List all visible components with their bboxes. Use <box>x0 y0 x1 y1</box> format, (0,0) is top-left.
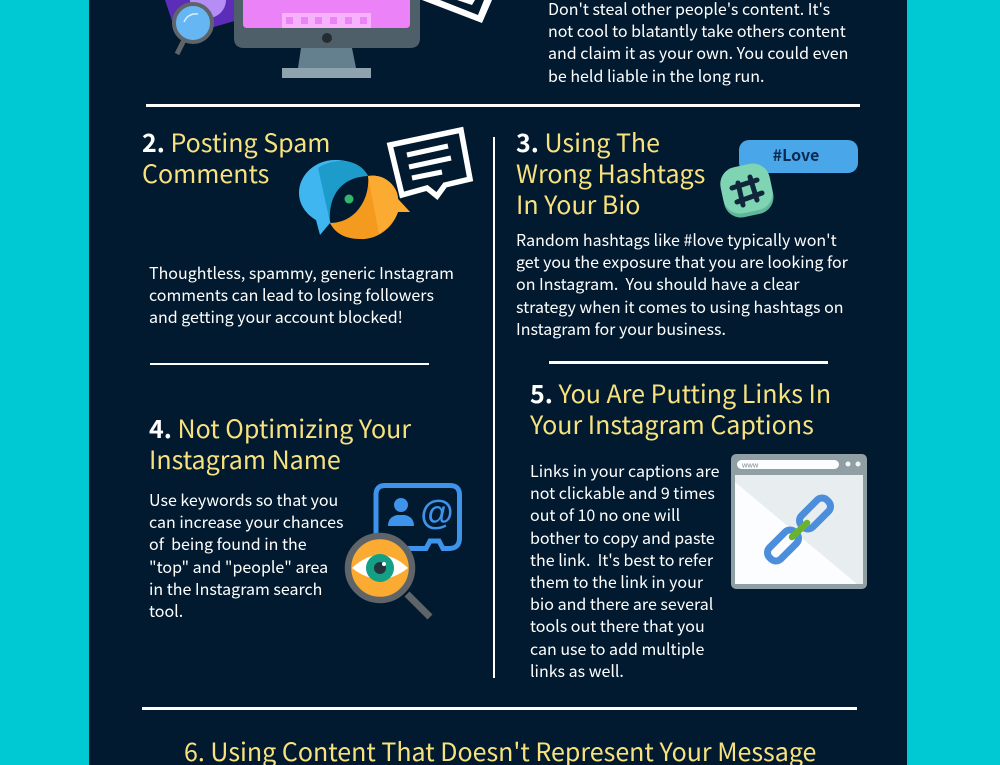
heading: item 2: Comments <box>142 155 269 191</box>
heading: item 3: In Your Bio <box>516 186 640 222</box>
text: item 3 body: Instagram for your business. <box>516 316 726 340</box>
text: item 4 body: "top" and "people" area <box>149 554 328 578</box>
heading: item 4: Instagram Name <box>149 441 341 477</box>
text: item 5 body: the link. It's best to refer <box>530 547 713 571</box>
text: item 3 body: get you the exposure that you are looking for <box>516 249 848 273</box>
text: item 3 body: Random hashtags like #love typically won't <box>516 227 837 251</box>
text: item 4 body: tool. <box>149 598 183 622</box>
heading: item 5: 5. You Are Putting Links In <box>530 375 831 411</box>
text: item 5 body: tools out there that you <box>530 613 705 637</box>
text: item 5 body: bio and there are several <box>530 591 713 615</box>
text: item 5 body: bother to copy and paste <box>530 525 715 549</box>
text: item 1 body: be held liable in the long run. <box>548 63 764 87</box>
text: item 2 body <box>149 260 454 328</box>
text: item 1 body: and claim it as your own. You could even <box>548 40 848 64</box>
text: item 5 body: links as well. <box>530 658 624 682</box>
text: item 2 body: comments can lead to losing followers <box>149 282 434 306</box>
text: item 4 body: can increase your chances <box>149 509 343 533</box>
text: item 4 body <box>149 487 343 622</box>
text: item 2 body: and getting your account blocked! <box>149 304 403 328</box>
text: item 5 body <box>530 458 719 682</box>
text: item 5 body: them to the link in your <box>530 569 703 593</box>
icon: monitor with magnifier <box>165 0 492 78</box>
text: item 4 body: of being found in the <box>149 531 307 555</box>
icon: hashtag bubble <box>720 140 858 218</box>
icon: browser window with chain link: www <box>741 460 759 470</box>
text: item 5 body: out of 10 no one will <box>530 502 680 526</box>
icon: browser window with chain link <box>731 454 867 589</box>
heading: item 3: Wrong Hashtags <box>516 155 705 191</box>
text: item 5 body: can use to add multiple <box>530 636 704 660</box>
text: item 3 body: strategy when it comes to using hashtags on <box>516 294 844 318</box>
text: item 4 body: in the Instagram search <box>149 576 322 600</box>
text: item 1 body: not cool to blatantly take others content <box>548 18 846 42</box>
text: item 2 body: Thoughtless, spammy, generic Instagram <box>149 260 454 284</box>
icon: profile card and magnifier eye: @ <box>420 494 454 532</box>
text: item 5 body: not clickable and 9 times <box>530 480 715 504</box>
text: item 3 body: on Instagram. You should have a clear <box>516 271 800 295</box>
heading: item 5 <box>530 375 831 442</box>
heading: item 4: 4. Not Optimizing Your <box>149 410 411 446</box>
icon: speech bubbles <box>299 126 474 240</box>
heading: item 3: 3. Using The <box>516 124 660 160</box>
heading: item 2: 2. Posting Spam <box>142 124 330 160</box>
text: item 3 body <box>516 227 848 340</box>
text: item 5 body: Links in your captions are <box>530 458 719 482</box>
text: item 1 body <box>548 0 848 87</box>
heading: item 3 <box>516 124 705 222</box>
heading: item 4 <box>149 410 412 477</box>
heading: item 2 <box>142 124 330 191</box>
icon: profile card and magnifier eye <box>344 483 462 620</box>
icon: hashtag bubble: #Love <box>773 142 819 166</box>
heading: item 5: Your Instagram Captions <box>530 406 814 442</box>
text: item 4 body: Use keywords so that you <box>149 487 338 511</box>
